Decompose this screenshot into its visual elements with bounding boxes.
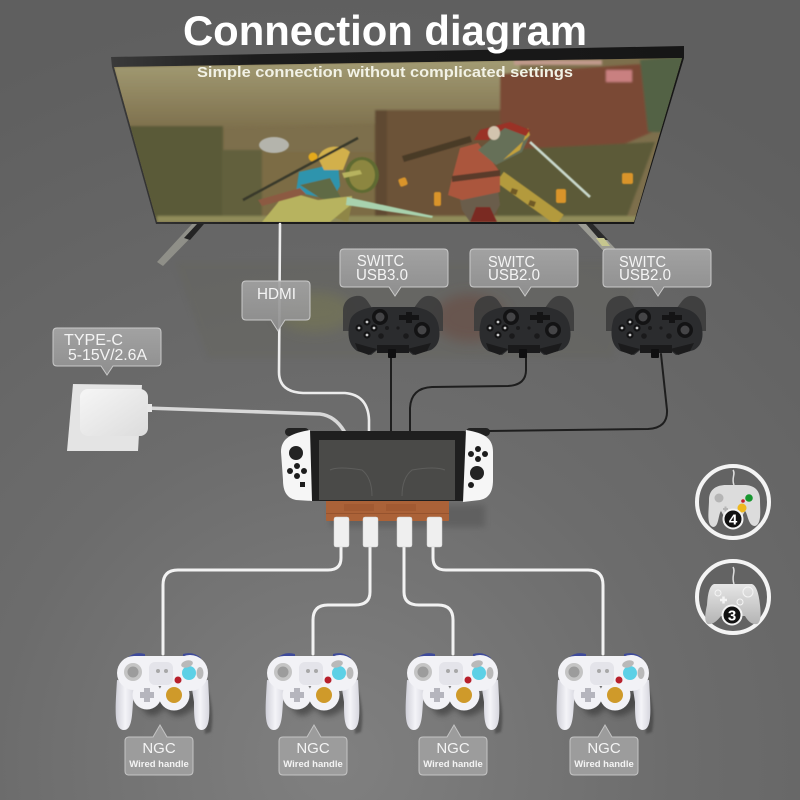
callout: NGC 2 [279, 725, 347, 775]
callout: NGC 3: NGC [436, 740, 470, 757]
callout: NGC 4: Wired handle [574, 759, 634, 770]
icon: 3 pro controllers: 3 [728, 608, 736, 624]
floor reflection of TV [175, 262, 645, 358]
NGC controller 3 [406, 653, 502, 734]
callout: TYPE-C: TYPE-C [64, 332, 123, 349]
USB cable 2 [410, 354, 526, 431]
left joy-con [281, 428, 312, 501]
console body [308, 431, 466, 501]
callout: HDMI: HDMI [257, 286, 296, 303]
callout: HDMI [242, 281, 310, 331]
callout: SWITC USB2.0 middle: USB2.0 [488, 267, 540, 284]
NGC cable 4 [433, 546, 603, 654]
NGC controller 1 [116, 653, 212, 734]
power adapter [67, 384, 152, 451]
TV screen game scene [114, 58, 682, 222]
cables to NGC controllers [163, 546, 603, 654]
TV stand legs [157, 224, 628, 266]
callout: SWITC USB3.0: USB3.0 [356, 267, 408, 284]
dock [326, 500, 449, 521]
NGC controller 2 [266, 653, 362, 734]
callout: SWITC USB2.0 right: SWITC [619, 254, 666, 271]
power cable [146, 408, 344, 431]
game console with dock [281, 428, 493, 547]
callout: SWITC USB2.0 middle: SWITC [488, 254, 535, 271]
callout: NGC 1: Wired handle [129, 759, 189, 770]
callout: SWITC USB2.0 right [603, 249, 711, 296]
Switch Pro controller 1 [343, 296, 443, 358]
USB cable 1 [390, 354, 392, 431]
Switch Pro controller 3 [606, 296, 706, 358]
HDMI cable [279, 224, 369, 431]
right joy-con [463, 428, 493, 502]
NGC cable 3 [404, 546, 453, 654]
callout: NGC 2: Wired handle [283, 759, 343, 770]
USB cable 3 [488, 354, 667, 431]
Switch Pro controller 2 [474, 296, 574, 358]
callout: SWITC USB2.0 middle [470, 249, 578, 296]
callout: NGC 4 [570, 725, 638, 775]
red warrior character [402, 122, 590, 222]
callout: NGC 1: NGC [142, 740, 176, 757]
callout: NGC 4: NGC [587, 740, 621, 757]
Link character [243, 138, 433, 222]
lanterns [398, 173, 633, 206]
NGC cable 2 [313, 546, 370, 654]
NGC controller 4 [557, 653, 653, 734]
callout: TYPE-C [53, 328, 161, 375]
TV frame [111, 46, 684, 224]
callout: NGC 1 [125, 725, 193, 775]
connector plugs [334, 517, 442, 547]
icon: 4 NGC controllers [697, 466, 769, 538]
cloud puff [259, 137, 289, 153]
callout: NGC 3: Wired handle [423, 759, 483, 770]
callout: SWITC USB3.0: SWITC [357, 253, 404, 270]
NGC cable 1 [163, 546, 341, 654]
callout: SWITC USB3.0 [340, 249, 448, 296]
icon: 3 pro controllers [697, 561, 769, 633]
callout: NGC 3 [419, 725, 487, 775]
icon: 4 NGC controllers: 4 [729, 512, 738, 528]
cables to upper devices [146, 224, 667, 431]
title: Connection diagram [183, 7, 587, 54]
subtitle: Simple connection without complicated settings [197, 64, 573, 81]
callout: SWITC USB2.0 right: USB2.0 [619, 267, 671, 284]
TV with stand [100, 46, 700, 266]
callout: NGC 2: NGC [296, 740, 330, 757]
callout: TYPE-C: 5-15V/2.6A [68, 347, 147, 364]
